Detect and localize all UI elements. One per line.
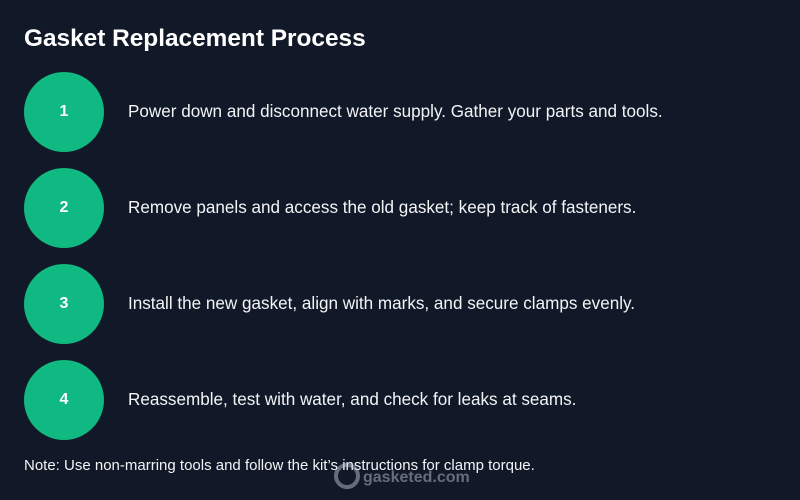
step 1 circle: 1 (60, 103, 68, 120)
step 1 text: Power down and disconnect water supply. Gather your parts and tools. (128, 102, 663, 121)
step 1 circle (24, 72, 104, 152)
step 3 circle: 3 (60, 295, 68, 312)
watermark logo (334, 463, 470, 489)
step 4 circle (24, 360, 104, 440)
step 2 circle: 2 (60, 199, 68, 216)
step 3 circle (24, 264, 104, 344)
step 2 circle (24, 168, 104, 248)
step 4 text: Reassemble, test with water, and check for leaks at seams. (128, 390, 576, 409)
step 3 text: Install the new gasket, align with marks, and secure clamps evenly. (128, 294, 635, 313)
step 4 circle: 4 (60, 391, 68, 408)
title: Gasket Replacement Process (24, 25, 366, 52)
watermark logo: gasketed.com (363, 469, 470, 486)
step 2 text: Remove panels and access the old gasket; keep track of fasteners. (128, 198, 636, 217)
note: Note: Use non-marring tools and follow the kit’s instructions for clamp torque. (24, 457, 535, 474)
